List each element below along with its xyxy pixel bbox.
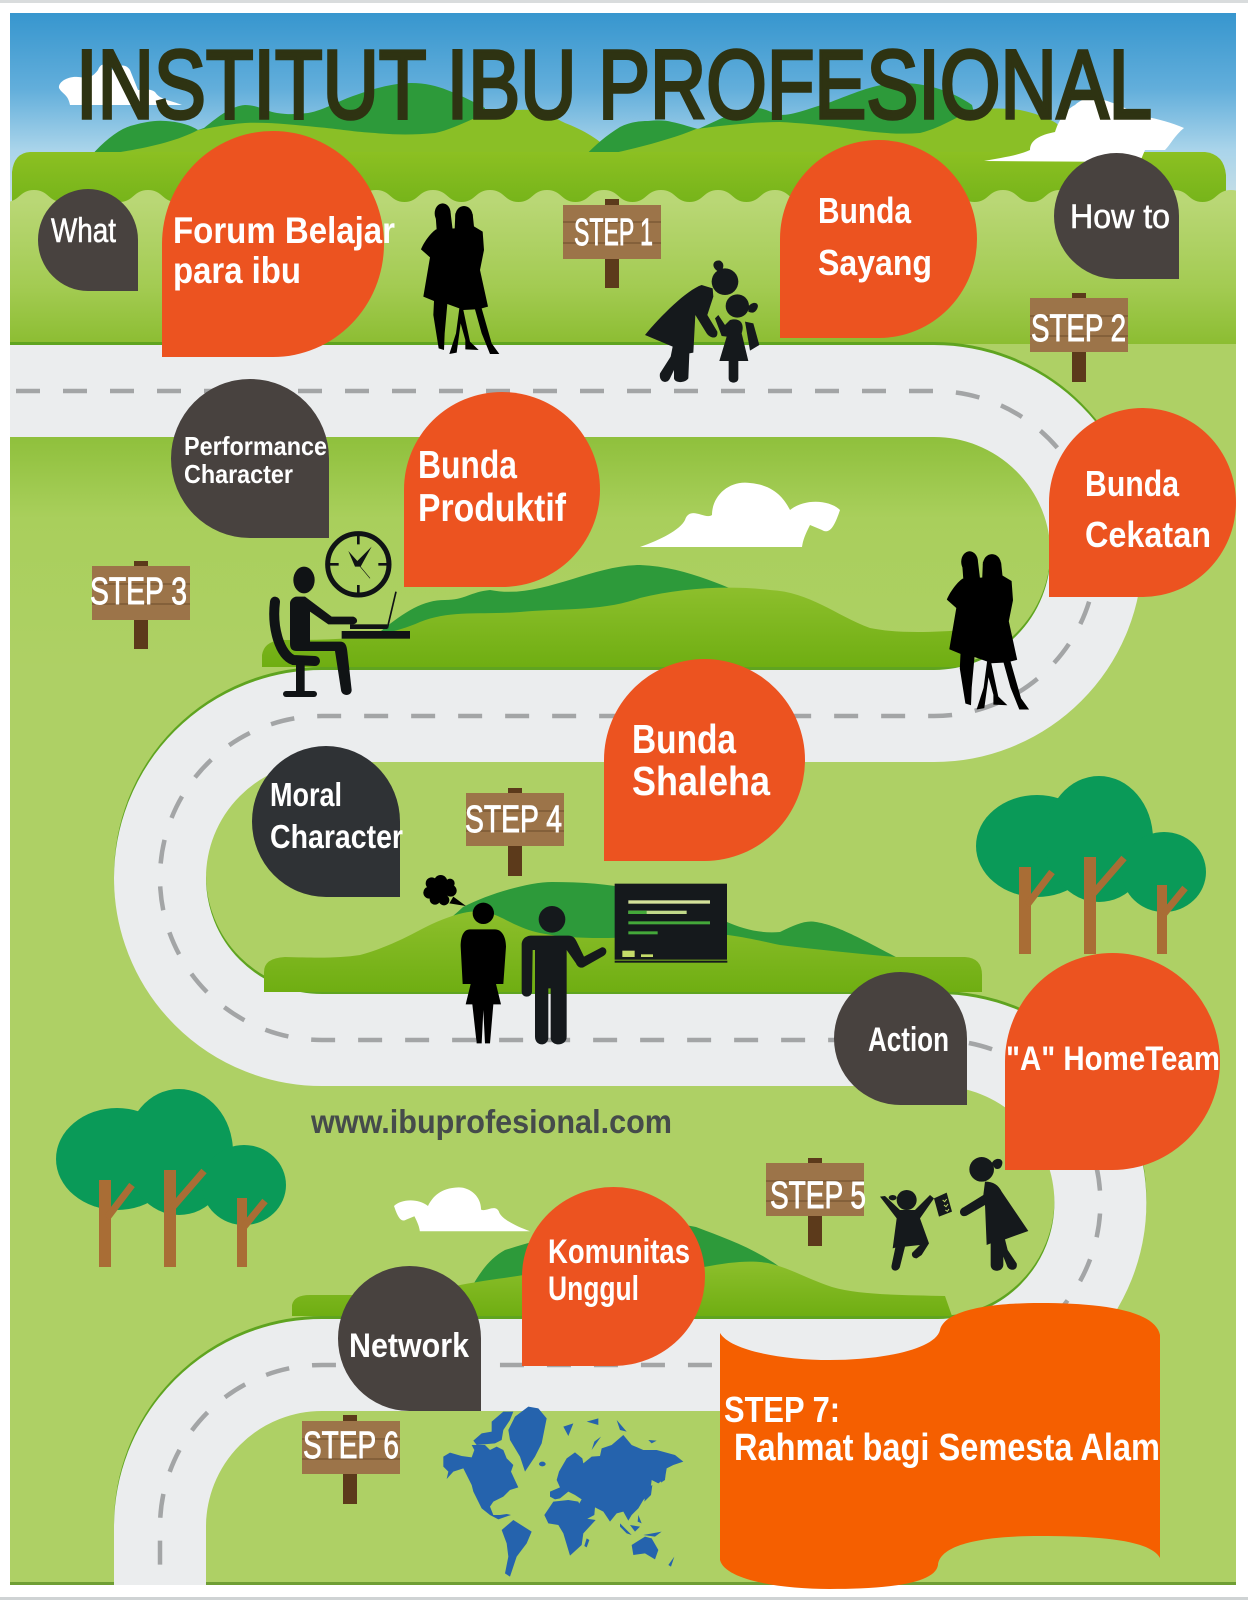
background hills — [91, 83, 1090, 156]
sign: step 4 — [465, 788, 564, 876]
bubble: komunitas unggul: Unggul — [548, 1270, 639, 1308]
banner: step 7: STEP 7: — [724, 1389, 840, 1430]
silhouette: two women middle — [947, 551, 1029, 709]
road centre dashes — [16, 391, 1100, 1575]
trees: right group — [976, 776, 1206, 954]
bubble: bunda shaleha: Bunda — [632, 716, 737, 762]
bubble: forum belajar: Forum Belajar — [173, 210, 395, 251]
bubble: bunda shaleha: Shaleha — [632, 758, 771, 804]
silhouette: two women top — [421, 203, 499, 354]
bubble: moral character: Moral — [270, 776, 342, 813]
cloud: middle — [640, 483, 840, 547]
bubble: performance character: Character — [184, 459, 293, 489]
road — [10, 388, 1100, 1585]
bubble: komunitas unggul — [522, 1187, 705, 1366]
website address: www.ibuprofesional.com — [310, 1103, 672, 1140]
bubble: bunda cekatan: Bunda — [1085, 463, 1180, 504]
icon: worker at desk with clock — [274, 534, 410, 695]
green band — [12, 152, 1226, 203]
hills: upper road — [262, 565, 965, 667]
sign: step 3 — [90, 561, 190, 649]
bubble: how to — [1054, 153, 1179, 279]
bubble: performance character — [171, 379, 329, 538]
sign: step 1 — [563, 199, 661, 288]
sign: step 5 — [766, 1158, 866, 1246]
bubble: a hometeam — [1005, 953, 1220, 1170]
bubble: komunitas unggul: Komunitas — [548, 1233, 690, 1271]
sky — [10, 13, 1236, 203]
bubble: bunda sayang: Bunda — [818, 190, 912, 231]
sign: step 1: STEP 1 — [574, 212, 653, 254]
bubble: bunda produktif: Produktif — [418, 487, 567, 530]
bubble: forum belajar — [162, 131, 395, 357]
bubble: what — [38, 189, 138, 291]
bubble: bunda cekatan: Cekatan — [1085, 514, 1211, 555]
silhouette: mother and child greeting — [645, 261, 759, 383]
bubble: action — [834, 972, 967, 1105]
sign: step 2: STEP 2 — [1031, 308, 1126, 350]
icon: world map — [443, 1407, 683, 1577]
bubble: a hometeam: "A" HomeTeam — [1006, 1040, 1220, 1078]
bubble: bunda produktif: Bunda — [418, 444, 517, 487]
bubble: bunda produktif — [404, 392, 600, 587]
bubble: performance character: Performance — [184, 431, 327, 461]
cloud: top left — [59, 65, 182, 105]
bubble: what: What — [51, 212, 116, 250]
bubble: network: Network — [349, 1327, 469, 1365]
hills: middle road — [264, 882, 982, 992]
sign: step 3: STEP 3 — [90, 571, 187, 613]
bubble: moral character: Character — [270, 818, 403, 855]
sign: step 6 — [302, 1415, 400, 1504]
bubble: bunda cekatan — [1049, 408, 1236, 597]
bubble: network — [338, 1266, 481, 1411]
cloud: lower — [394, 1187, 530, 1231]
bubble: bunda sayang: Sayang — [818, 242, 932, 283]
banner: step 7 — [720, 1303, 1160, 1589]
bubble: action: Action — [868, 1021, 949, 1059]
hills: lower road — [292, 1223, 952, 1316]
icon: teacher with blackboard — [423, 875, 727, 1044]
bubble: bunda shaleha — [604, 659, 805, 861]
bubble: bunda sayang — [780, 140, 977, 338]
sign: step 2 — [1030, 293, 1128, 382]
bubble: forum belajar: para ibu — [173, 250, 301, 291]
trees: left group — [56, 1089, 286, 1267]
icon: mother and child with report — [880, 1157, 1028, 1271]
cloud: top right — [984, 98, 1184, 162]
sign: step 5: STEP 5 — [770, 1175, 866, 1217]
sign: step 4: STEP 4 — [465, 799, 562, 841]
bubble: moral character — [252, 746, 403, 897]
banner: step 7: Rahmat bagi Semesta Alam — [734, 1427, 1160, 1469]
sign: step 6: STEP 6 — [303, 1425, 399, 1467]
bubble: how to: How to — [1070, 198, 1170, 236]
